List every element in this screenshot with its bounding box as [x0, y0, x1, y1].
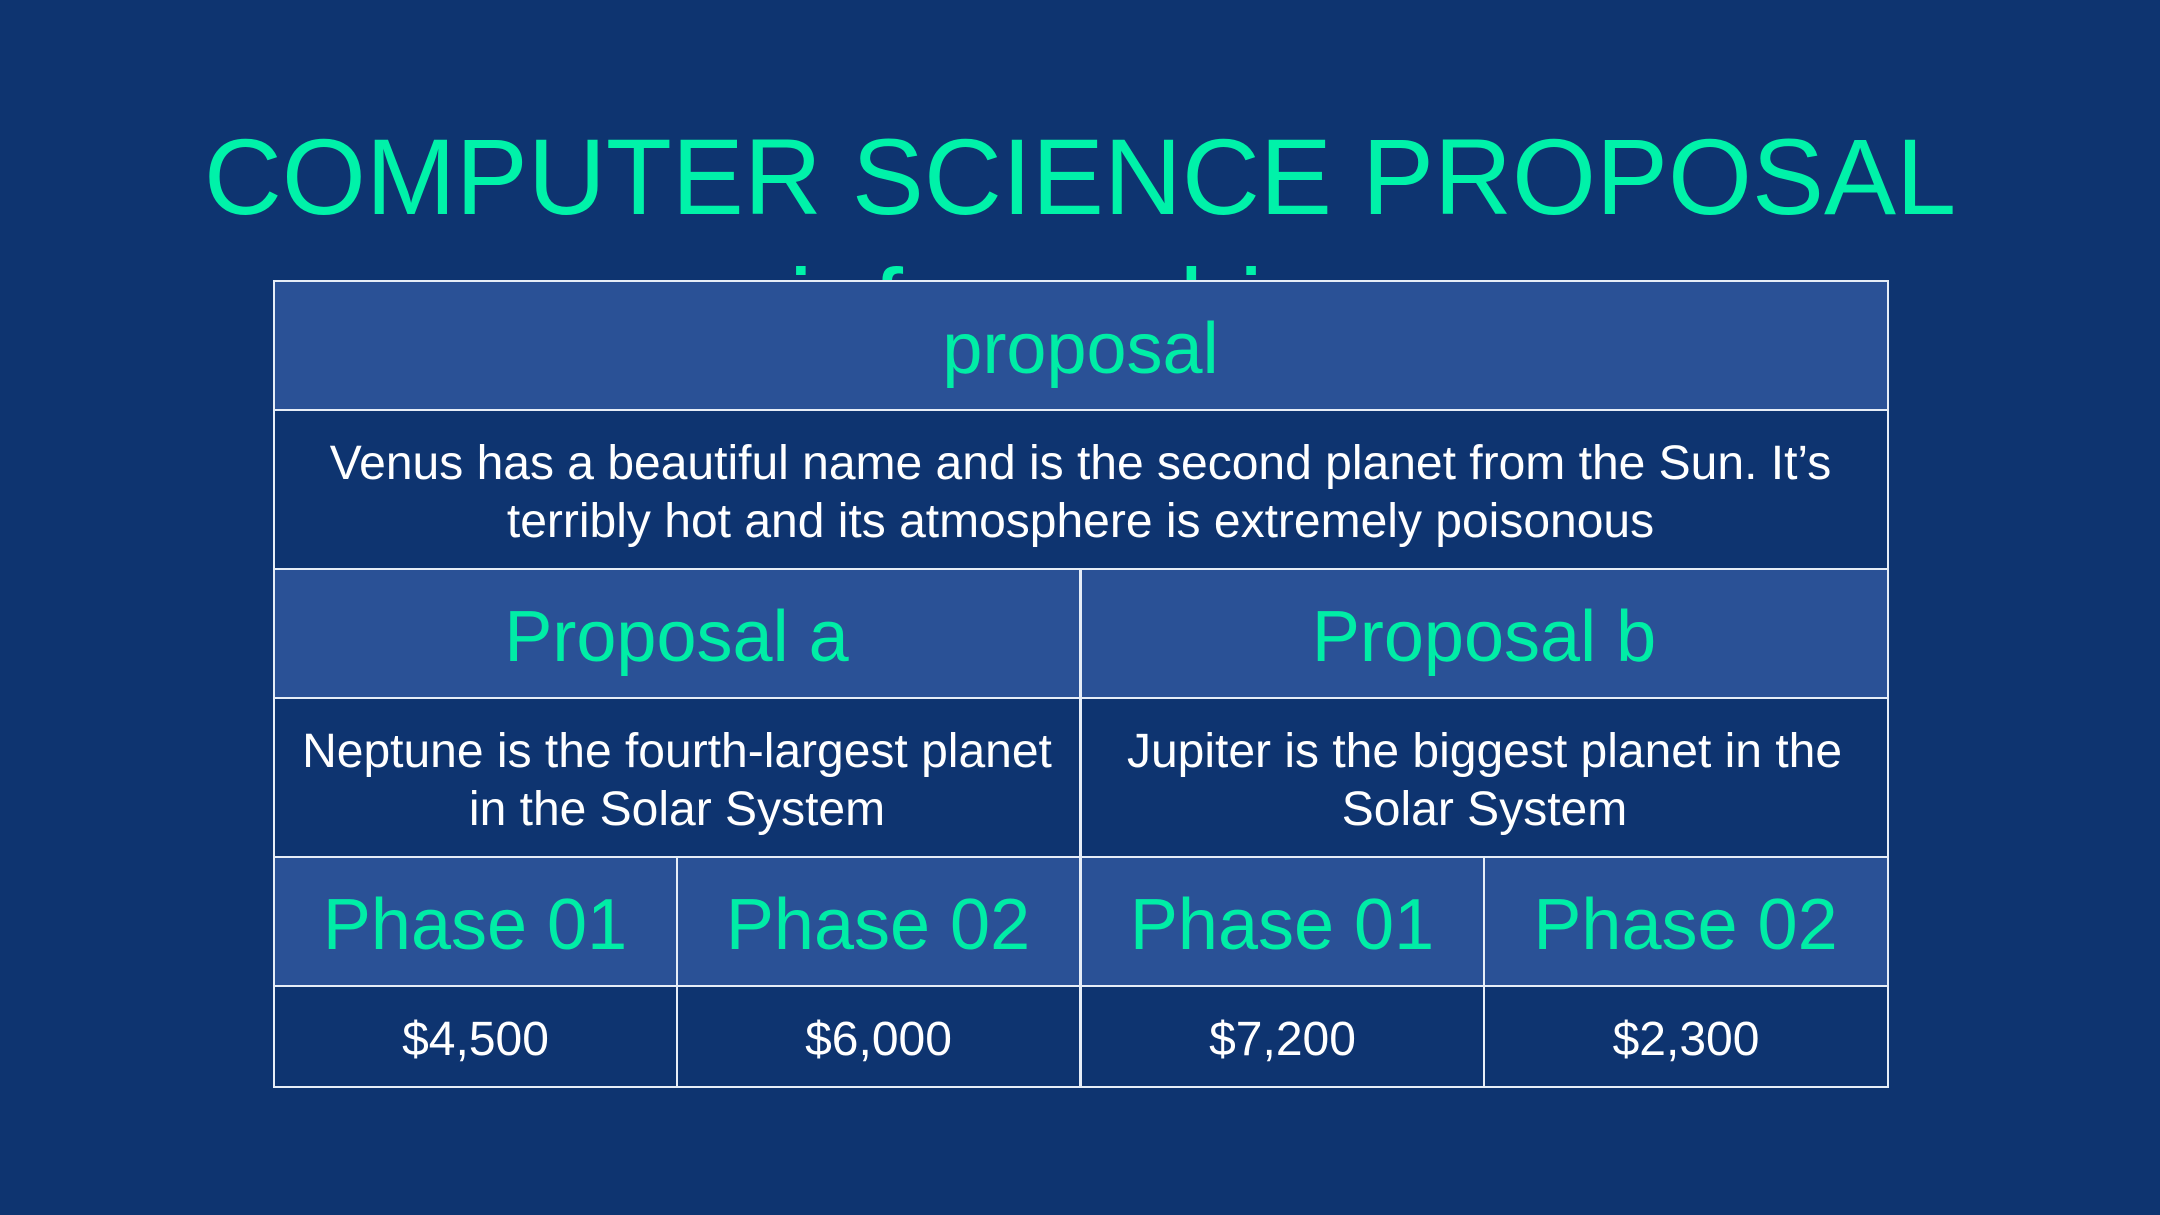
header: Proposal a Phase 02: Phase 02	[726, 884, 1030, 964]
value: $2,300	[1483, 985, 1889, 1088]
header: Proposal a Phase 02	[676, 856, 1081, 987]
description: Venus: terribly hot and its atmosphere is extremely poisonous	[507, 495, 1654, 548]
header: Proposal b Phase 01	[1080, 856, 1485, 987]
description: Neptune: Neptune is the fourth-largest planet	[302, 725, 1052, 778]
header: Proposal b: Proposal b	[1312, 596, 1656, 676]
header: Proposal b Phase 02	[1483, 856, 1889, 987]
description: Jupiter	[1080, 697, 1889, 858]
header: proposal	[273, 280, 1889, 411]
header: Proposal b	[1080, 568, 1889, 699]
value: $6,000: $6,000	[805, 1012, 952, 1066]
title: COMPUTER SCIENCE PROPOSAL	[204, 116, 1956, 237]
description: Venus: Venus has a beautiful name and is the second planet from the Sun. It’s	[330, 437, 1831, 490]
value: $4,500	[273, 985, 678, 1088]
value: $4,500: $4,500	[402, 1012, 549, 1066]
header: Proposal a: Proposal a	[504, 596, 849, 676]
description: Neptune	[273, 697, 1081, 858]
value: $7,200	[1080, 985, 1485, 1088]
header: Proposal a Phase 01	[273, 856, 678, 987]
description: Neptune: in the Solar System	[469, 783, 885, 836]
header: Proposal b Phase 01: Phase 01	[1130, 884, 1434, 964]
value: $7,200: $7,200	[1209, 1012, 1356, 1066]
description: Jupiter: Jupiter is the biggest planet in the	[1127, 725, 1842, 778]
description: Jupiter: Solar System	[1342, 783, 1627, 836]
title: infographics	[789, 246, 1371, 367]
header: proposal: proposal	[942, 308, 1219, 388]
title	[204, 116, 1956, 367]
description: Venus	[273, 409, 1889, 570]
header: Proposal a	[273, 568, 1081, 699]
value: $6,000	[676, 985, 1081, 1088]
header: Proposal b Phase 02: Phase 02	[1533, 884, 1838, 964]
header: Proposal a Phase 01: Phase 01	[323, 884, 627, 964]
value: $2,300: $2,300	[1613, 1012, 1759, 1066]
